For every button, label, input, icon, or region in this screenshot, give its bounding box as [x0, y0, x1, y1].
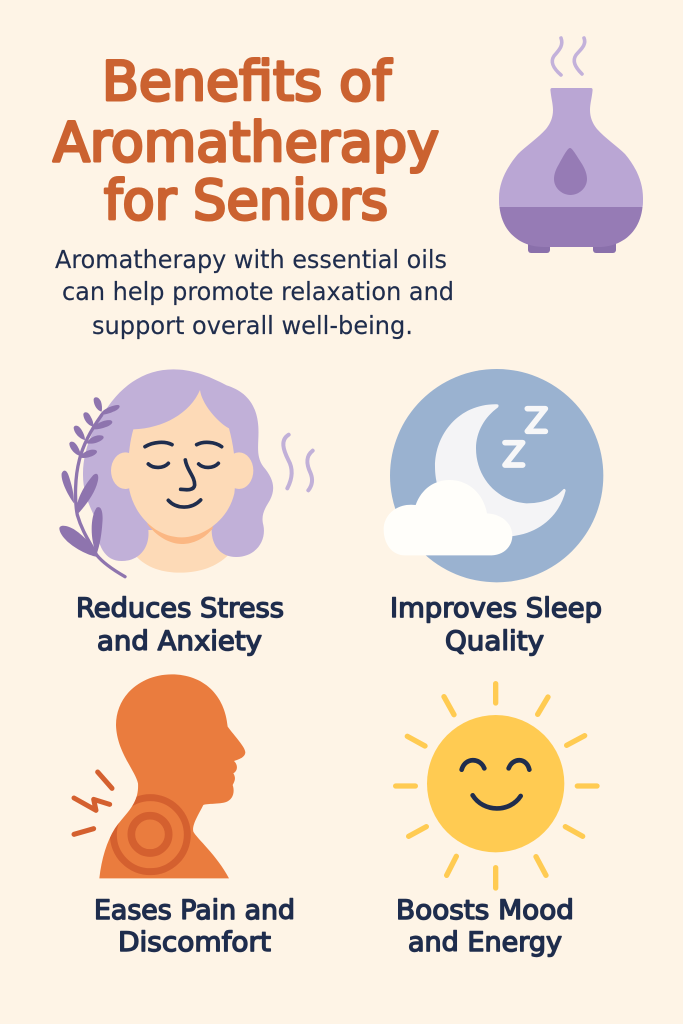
icon: relaxed woman with lavender [59, 369, 313, 577]
sun rays [396, 684, 597, 888]
face [128, 390, 235, 537]
label: eases pain [94, 895, 295, 958]
intro text [55, 245, 454, 340]
cloud [384, 480, 512, 555]
title [53, 50, 439, 232]
intro text: can help promote relaxation and [62, 277, 454, 306]
label: boosts mood: Boosts Mood [396, 895, 574, 926]
icon: smiling sun [396, 684, 597, 888]
sun disc [427, 715, 564, 852]
label: boosts mood [396, 895, 574, 958]
title: Aromatherapy [53, 111, 439, 174]
label: eases pain: Eases Pain and [94, 895, 295, 926]
label: improves sleep: Improves Sleep [390, 593, 602, 624]
ears [111, 452, 140, 489]
label: reduces stress: and Anxiety [97, 626, 262, 657]
label: improves sleep: Quality [445, 626, 544, 657]
label: boosts mood: and Energy [408, 927, 562, 958]
icon: aroma diffuser [499, 38, 643, 253]
head and shoulders [99, 674, 245, 878]
label: reduces stress [76, 593, 284, 657]
zzz [505, 409, 545, 465]
pain rings [113, 798, 187, 872]
title: for Seniors [104, 169, 388, 232]
intro text: support overall well-being. [92, 311, 413, 340]
infographic canvas [52, 36, 643, 958]
label: reduces stress: Reduces Stress [76, 593, 284, 624]
collar shadow [147, 523, 213, 544]
icon: neck pain silhouette [74, 674, 245, 878]
neck [135, 520, 228, 573]
night circle [390, 369, 603, 582]
intro text: Aromatherapy with essential oils [55, 245, 447, 274]
smile face [462, 760, 529, 808]
facial features [145, 442, 222, 507]
crescent moon [435, 404, 566, 537]
lavender sprig [59, 397, 125, 577]
label: improves sleep [390, 593, 602, 657]
scent waves [283, 435, 313, 490]
icon: moon and cloud [384, 369, 603, 582]
pain marks [74, 772, 112, 834]
label: eases pain: Discomfort [118, 927, 271, 958]
hair [83, 369, 273, 561]
title: Benefits of [102, 50, 393, 113]
